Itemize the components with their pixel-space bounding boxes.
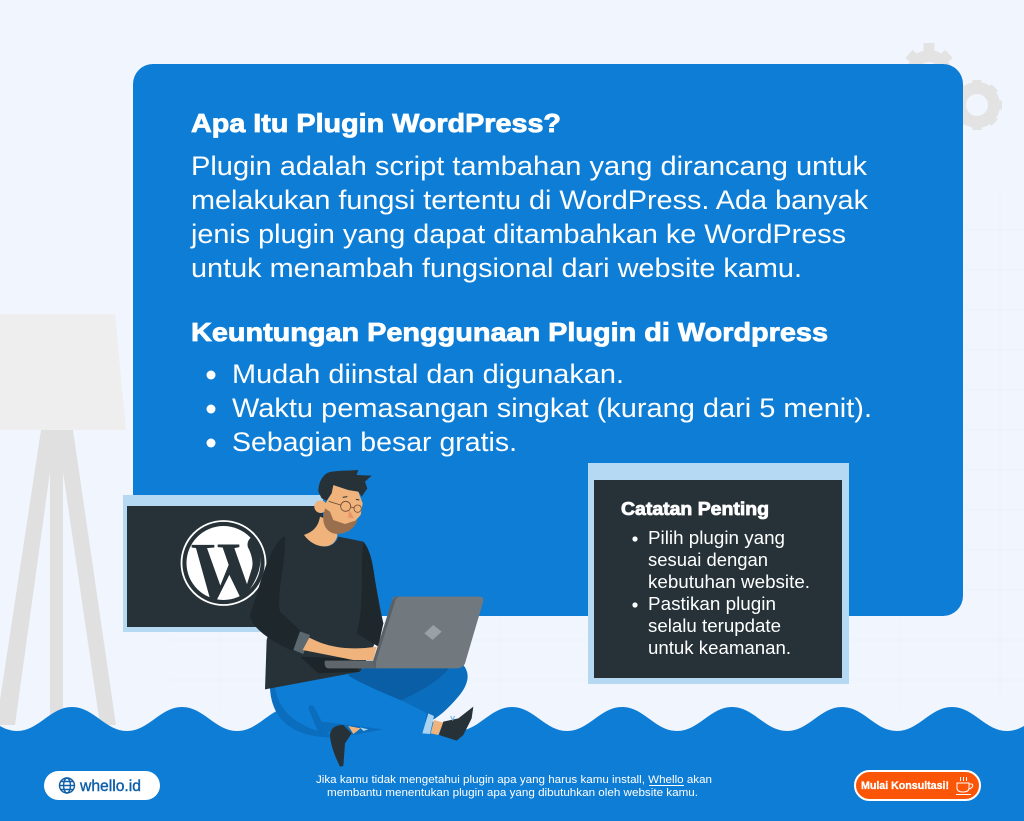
near arm xyxy=(250,536,303,652)
lamp shade xyxy=(0,314,126,430)
icon: right foot xyxy=(422,707,473,741)
heading: important notes: Catatan Penting xyxy=(621,499,769,519)
head xyxy=(314,470,372,534)
footer note xyxy=(316,774,712,799)
torso shadow xyxy=(300,657,360,673)
icon: small gear xyxy=(952,80,1002,130)
illustration: man with laptop xyxy=(250,470,483,767)
button: Mulai Konsultasi xyxy=(855,771,980,800)
glasses xyxy=(329,501,361,512)
label: Mulai Konsultasi: Mulai Konsultasi! xyxy=(861,780,949,792)
icon: globe xyxy=(60,778,74,793)
near leg xyxy=(270,670,427,733)
text block: plugin definition: melakukan fungsi tertentu di WordPress. Ada banyak xyxy=(191,185,869,215)
label: whello.id: whello.id xyxy=(79,778,141,795)
hip line xyxy=(270,687,333,737)
list: notes: Pastikan plugin xyxy=(648,594,776,614)
panel: important notes xyxy=(588,463,849,684)
ear xyxy=(314,500,327,513)
text block: plugin definition: untuk menambah fungsional dari website kamu. xyxy=(191,253,802,283)
icon: laptop xyxy=(325,597,483,668)
torso xyxy=(265,535,383,689)
footer note: membantu menentukan plugin apa yang dibutuhkan oleh website kamu. xyxy=(327,787,698,799)
nose xyxy=(348,510,354,518)
beard xyxy=(323,508,357,534)
icon: large gear xyxy=(905,43,953,94)
icon: coffee cup xyxy=(956,777,973,794)
footer note: Jika kamu tidak mengetahui plugin apa yang harus kamu install, Whello akan xyxy=(316,774,712,786)
list: notes: selalu terupdate xyxy=(648,616,781,636)
far leg xyxy=(333,665,468,723)
heading: benefits: Keuntungan Penggunaan Plugin di Wordpress xyxy=(191,317,828,347)
neck xyxy=(304,517,337,546)
leg fold xyxy=(308,705,383,737)
list: notes: untuk keamanan. xyxy=(648,638,791,658)
heading: what is a plugin: Apa Itu Plugin WordPress? xyxy=(191,108,561,138)
list: notes: kebutuhan website. xyxy=(648,572,810,592)
list: benefits xyxy=(206,359,872,457)
lamp legs xyxy=(0,430,116,725)
eyes xyxy=(343,497,359,500)
wave: footer band xyxy=(0,707,1024,821)
far leg shadow xyxy=(333,667,450,700)
icon: gears xyxy=(905,43,1002,130)
icon: WordPress logo xyxy=(182,521,266,605)
list: notes: sesuai dengan xyxy=(648,550,768,570)
badge: whello.id xyxy=(44,771,160,800)
list: benefits: Waktu pemasangan singkat (kurang dari 5 menit). xyxy=(232,393,872,423)
text block: plugin definition: jenis plugin yang dapat ditambahkan ke WordPress xyxy=(190,219,846,249)
panel: main blue card xyxy=(133,64,963,616)
list: benefits: Mudah diinstal dan digunakan. xyxy=(232,359,624,389)
panel: WordPress screen xyxy=(123,495,323,632)
list: notes: Pilih plugin yang xyxy=(648,528,785,548)
icon: left foot xyxy=(330,725,368,767)
hand xyxy=(303,638,377,660)
face xyxy=(324,485,363,527)
list: benefits: Sebagian besar gratis. xyxy=(232,427,517,457)
text block: plugin definition: Plugin adalah script tambahan yang dirancang untuk xyxy=(191,151,868,181)
sleeve cuff xyxy=(293,631,310,654)
hair xyxy=(318,470,372,501)
list: notes xyxy=(632,528,810,658)
lamp xyxy=(0,314,126,725)
text block: plugin definition xyxy=(190,151,869,283)
far arm xyxy=(357,542,383,647)
